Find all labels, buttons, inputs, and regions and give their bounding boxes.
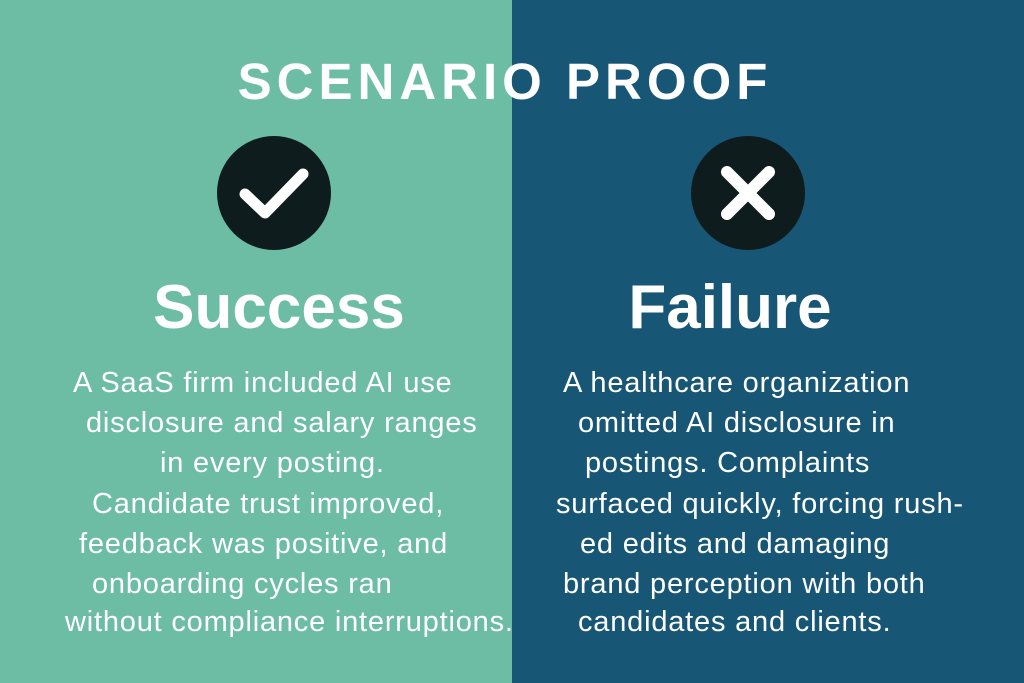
text block: success description <box>65 367 514 638</box>
text block: success description: A SaaS firm included AI use <box>73 367 452 399</box>
text block: success description: in every posting. <box>160 447 385 479</box>
text block: failure description: surfaced quickly, forcing rush- <box>556 488 964 520</box>
heading: success: Success <box>153 273 405 342</box>
text block: success description: feedback was positive, and <box>79 528 448 560</box>
text block: failure description <box>556 367 964 638</box>
icon: cross <box>691 136 805 250</box>
text block: failure description: postings. Complaints <box>585 447 870 479</box>
text block: failure description: ed edits and damaging <box>580 528 890 560</box>
text block: failure description: candidates and clients. <box>578 606 891 638</box>
title: SCENARIO PROOF <box>238 53 772 110</box>
text block: success description: onboarding cycles ran <box>92 568 393 600</box>
panel: success background <box>0 0 512 683</box>
text block: success description: without compliance interruptions. <box>65 606 514 638</box>
text block: failure description: A healthcare organization <box>563 367 910 399</box>
panel: failure background <box>512 0 1024 683</box>
heading: failure: Failure <box>628 273 832 342</box>
text block: success description: Candidate trust improved, <box>92 488 444 520</box>
text block: failure description: brand perception with both <box>563 568 926 600</box>
text block: failure description: omitted AI disclosure in <box>578 407 895 439</box>
icon: check mark <box>217 136 331 250</box>
text block: success description: disclosure and salary ranges <box>86 407 478 439</box>
